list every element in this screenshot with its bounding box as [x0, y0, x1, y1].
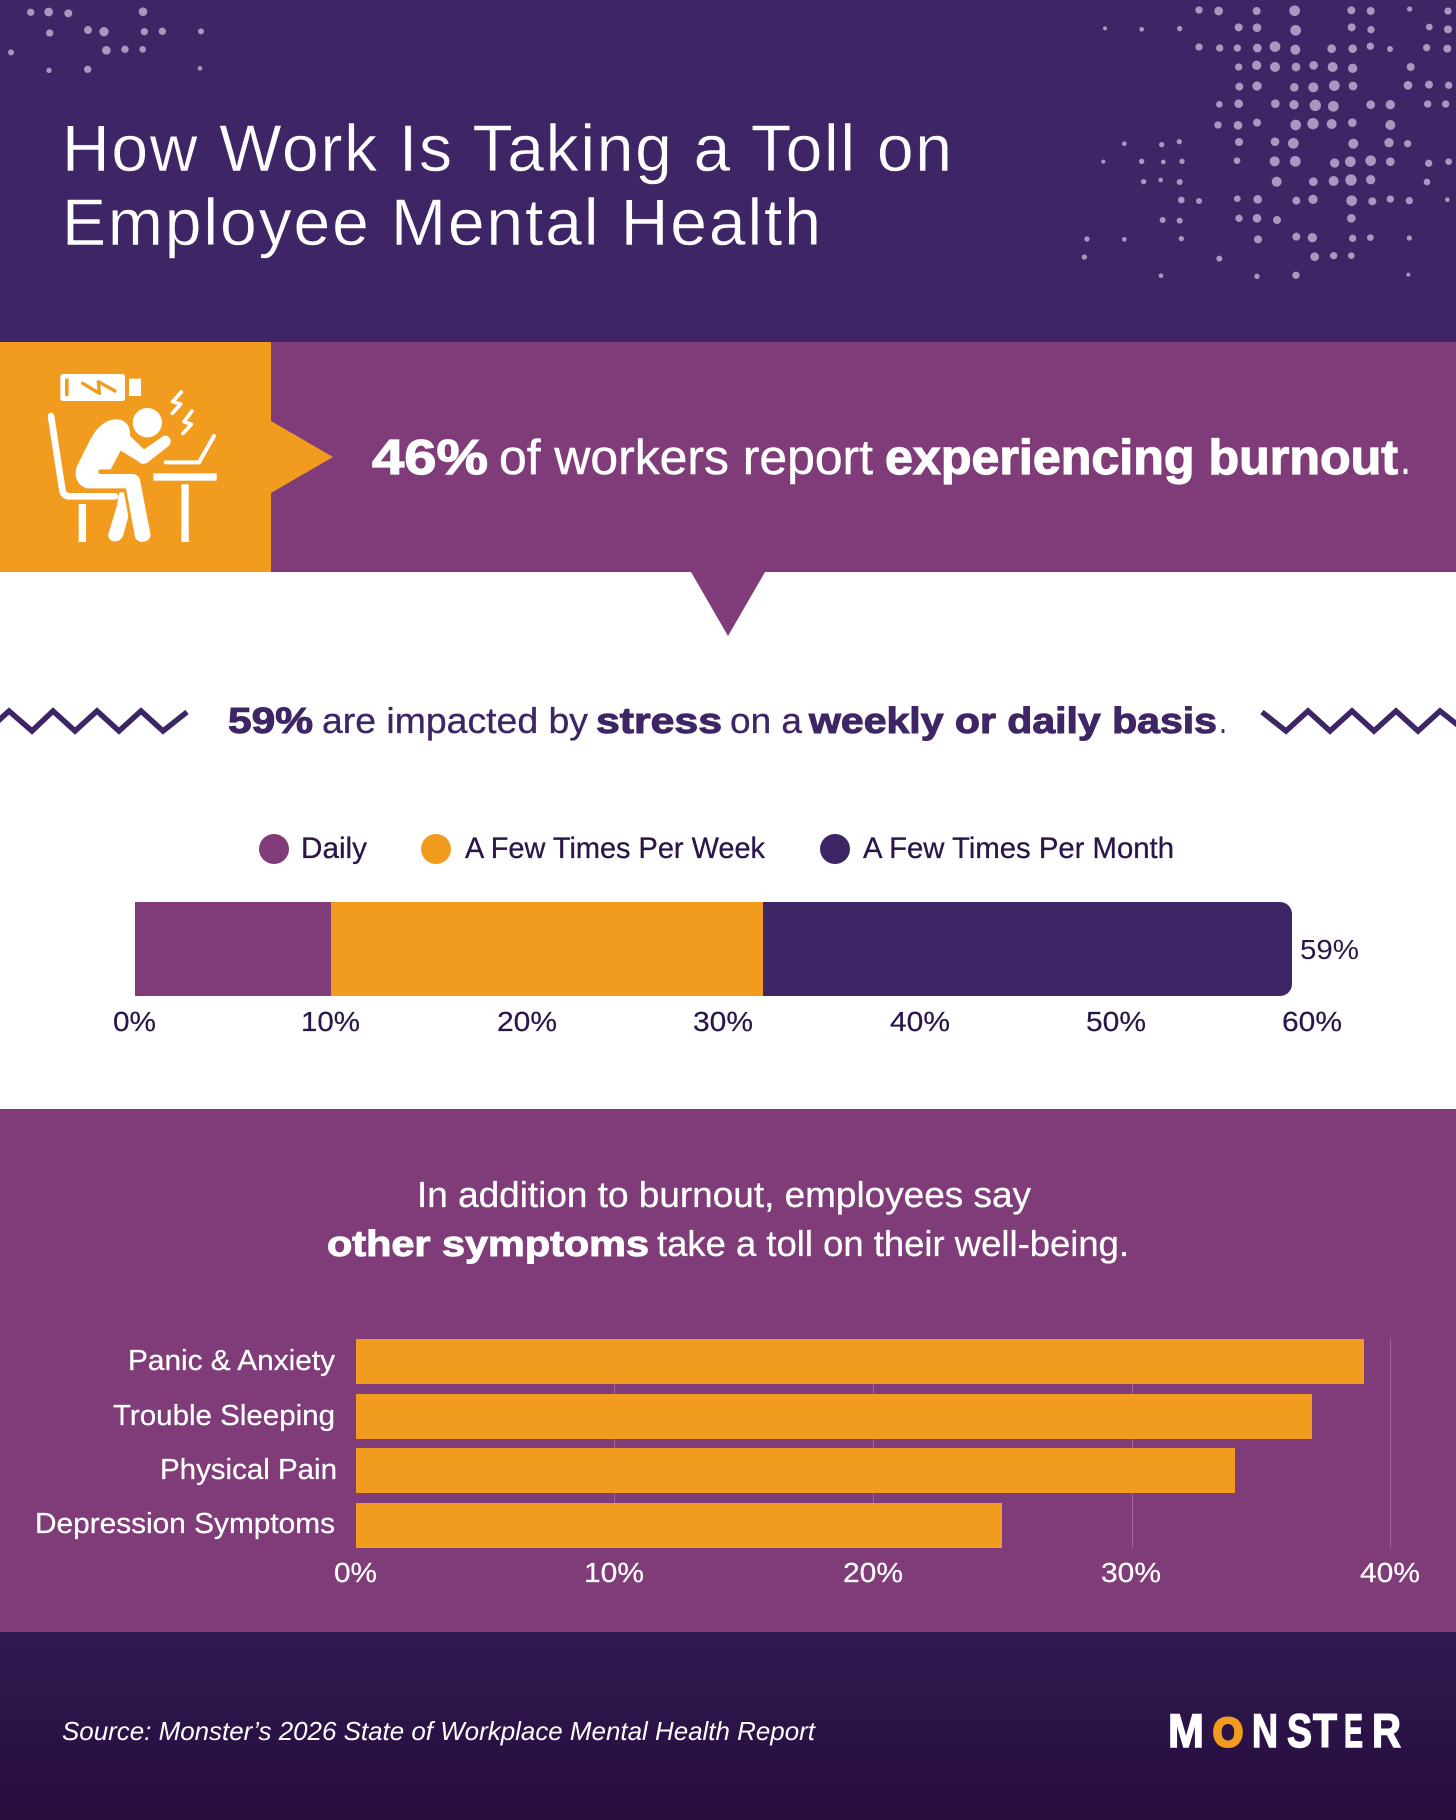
logo: monster: [1168, 1704, 1401, 1757]
bar: trouble sleeping: [356, 1394, 1312, 1439]
logo: monster: R: [1372, 1704, 1401, 1757]
axis labels: 30%: [1101, 1557, 1161, 1588]
source: Source: Monster’s 2026 State of Workplace Mental Health Report: [62, 1716, 817, 1746]
stacked bar chart: [113, 902, 1359, 1037]
axis labels: 10%: [584, 1557, 644, 1588]
axis labels: 40%: [1360, 1557, 1420, 1588]
panel: footer: [0, 1632, 1456, 1820]
panel: burnout callout: [0, 342, 1456, 636]
logo: monster: N: [1252, 1704, 1278, 1757]
stress heading: .: [1219, 700, 1227, 741]
callout text: of workers report: [499, 431, 873, 485]
callout text: .: [1400, 431, 1411, 485]
panel: header: [0, 0, 1456, 342]
bar: panic and anxiety: [356, 1339, 1364, 1384]
panel: other symptoms: [0, 1109, 1456, 1632]
logo: monster: O: [1213, 1711, 1243, 1755]
axis labels: [334, 1557, 1420, 1588]
stress heading: weekly or daily basis: [808, 700, 1217, 741]
logo: monster: S: [1287, 1704, 1312, 1757]
title: Employee Mental Health: [62, 185, 821, 259]
callout text: experiencing burnout: [885, 431, 1398, 485]
symptoms heading: [327, 1174, 1129, 1264]
dot pattern: top right: [1082, 5, 1452, 279]
dot pattern: top left: [8, 7, 204, 73]
symptoms heading: take a toll on their well-being.: [657, 1223, 1129, 1264]
logo: monster: E: [1344, 1704, 1363, 1757]
bar: physical pain: [356, 1448, 1235, 1493]
logo: monster: M: [1168, 1704, 1204, 1757]
callout text: 46%: [372, 431, 488, 485]
axis labels: 10%: [301, 1006, 360, 1037]
icon: left zigzag: [0, 711, 187, 731]
axis labels: 50%: [1086, 1006, 1146, 1037]
axis labels: 40%: [890, 1006, 950, 1037]
axis labels: 20%: [497, 1006, 557, 1037]
title: How Work Is Taking a Toll on: [62, 111, 952, 185]
legend item: daily: Daily: [301, 832, 367, 865]
logo: monster: T: [1313, 1704, 1337, 1757]
legend item: a few times per month: A Few Times Per Month: [863, 832, 1174, 865]
stress heading: on a: [730, 700, 803, 741]
axis labels: 0%: [334, 1557, 377, 1588]
axis labels: [113, 1006, 1342, 1037]
category labels: Depression Symptoms: [35, 1508, 335, 1540]
axis labels: 30%: [693, 1006, 753, 1037]
axis labels: 20%: [843, 1557, 903, 1588]
title: [62, 111, 952, 259]
icon: exhausted worker at laptop: [51, 374, 217, 542]
stress heading: [228, 700, 1227, 741]
icon: right zigzag: [1262, 711, 1456, 731]
legend: [259, 832, 1174, 865]
category labels: Physical Pain: [160, 1454, 337, 1486]
stress heading: stress: [596, 700, 722, 741]
category labels: Panic & Anxiety: [128, 1345, 336, 1377]
axis labels: 0%: [113, 1006, 156, 1037]
legend item: daily: [259, 832, 367, 865]
stress heading: 59%: [228, 700, 313, 741]
stress heading: are impacted by: [322, 700, 588, 741]
callout text: [372, 431, 1411, 485]
symptoms heading: other symptoms: [327, 1223, 649, 1264]
axis labels: 60%: [1282, 1006, 1342, 1037]
category labels: Trouble Sleeping: [113, 1400, 335, 1432]
category labels: [35, 1345, 337, 1540]
horizontal bar chart: [35, 1339, 1420, 1588]
bar total label: 59%: [1300, 934, 1359, 965]
bar: depression symptoms: [356, 1503, 1002, 1548]
symptoms heading: In addition to burnout, employees say: [417, 1174, 1031, 1215]
legend item: a few times per week: A Few Times Per Week: [465, 832, 766, 865]
